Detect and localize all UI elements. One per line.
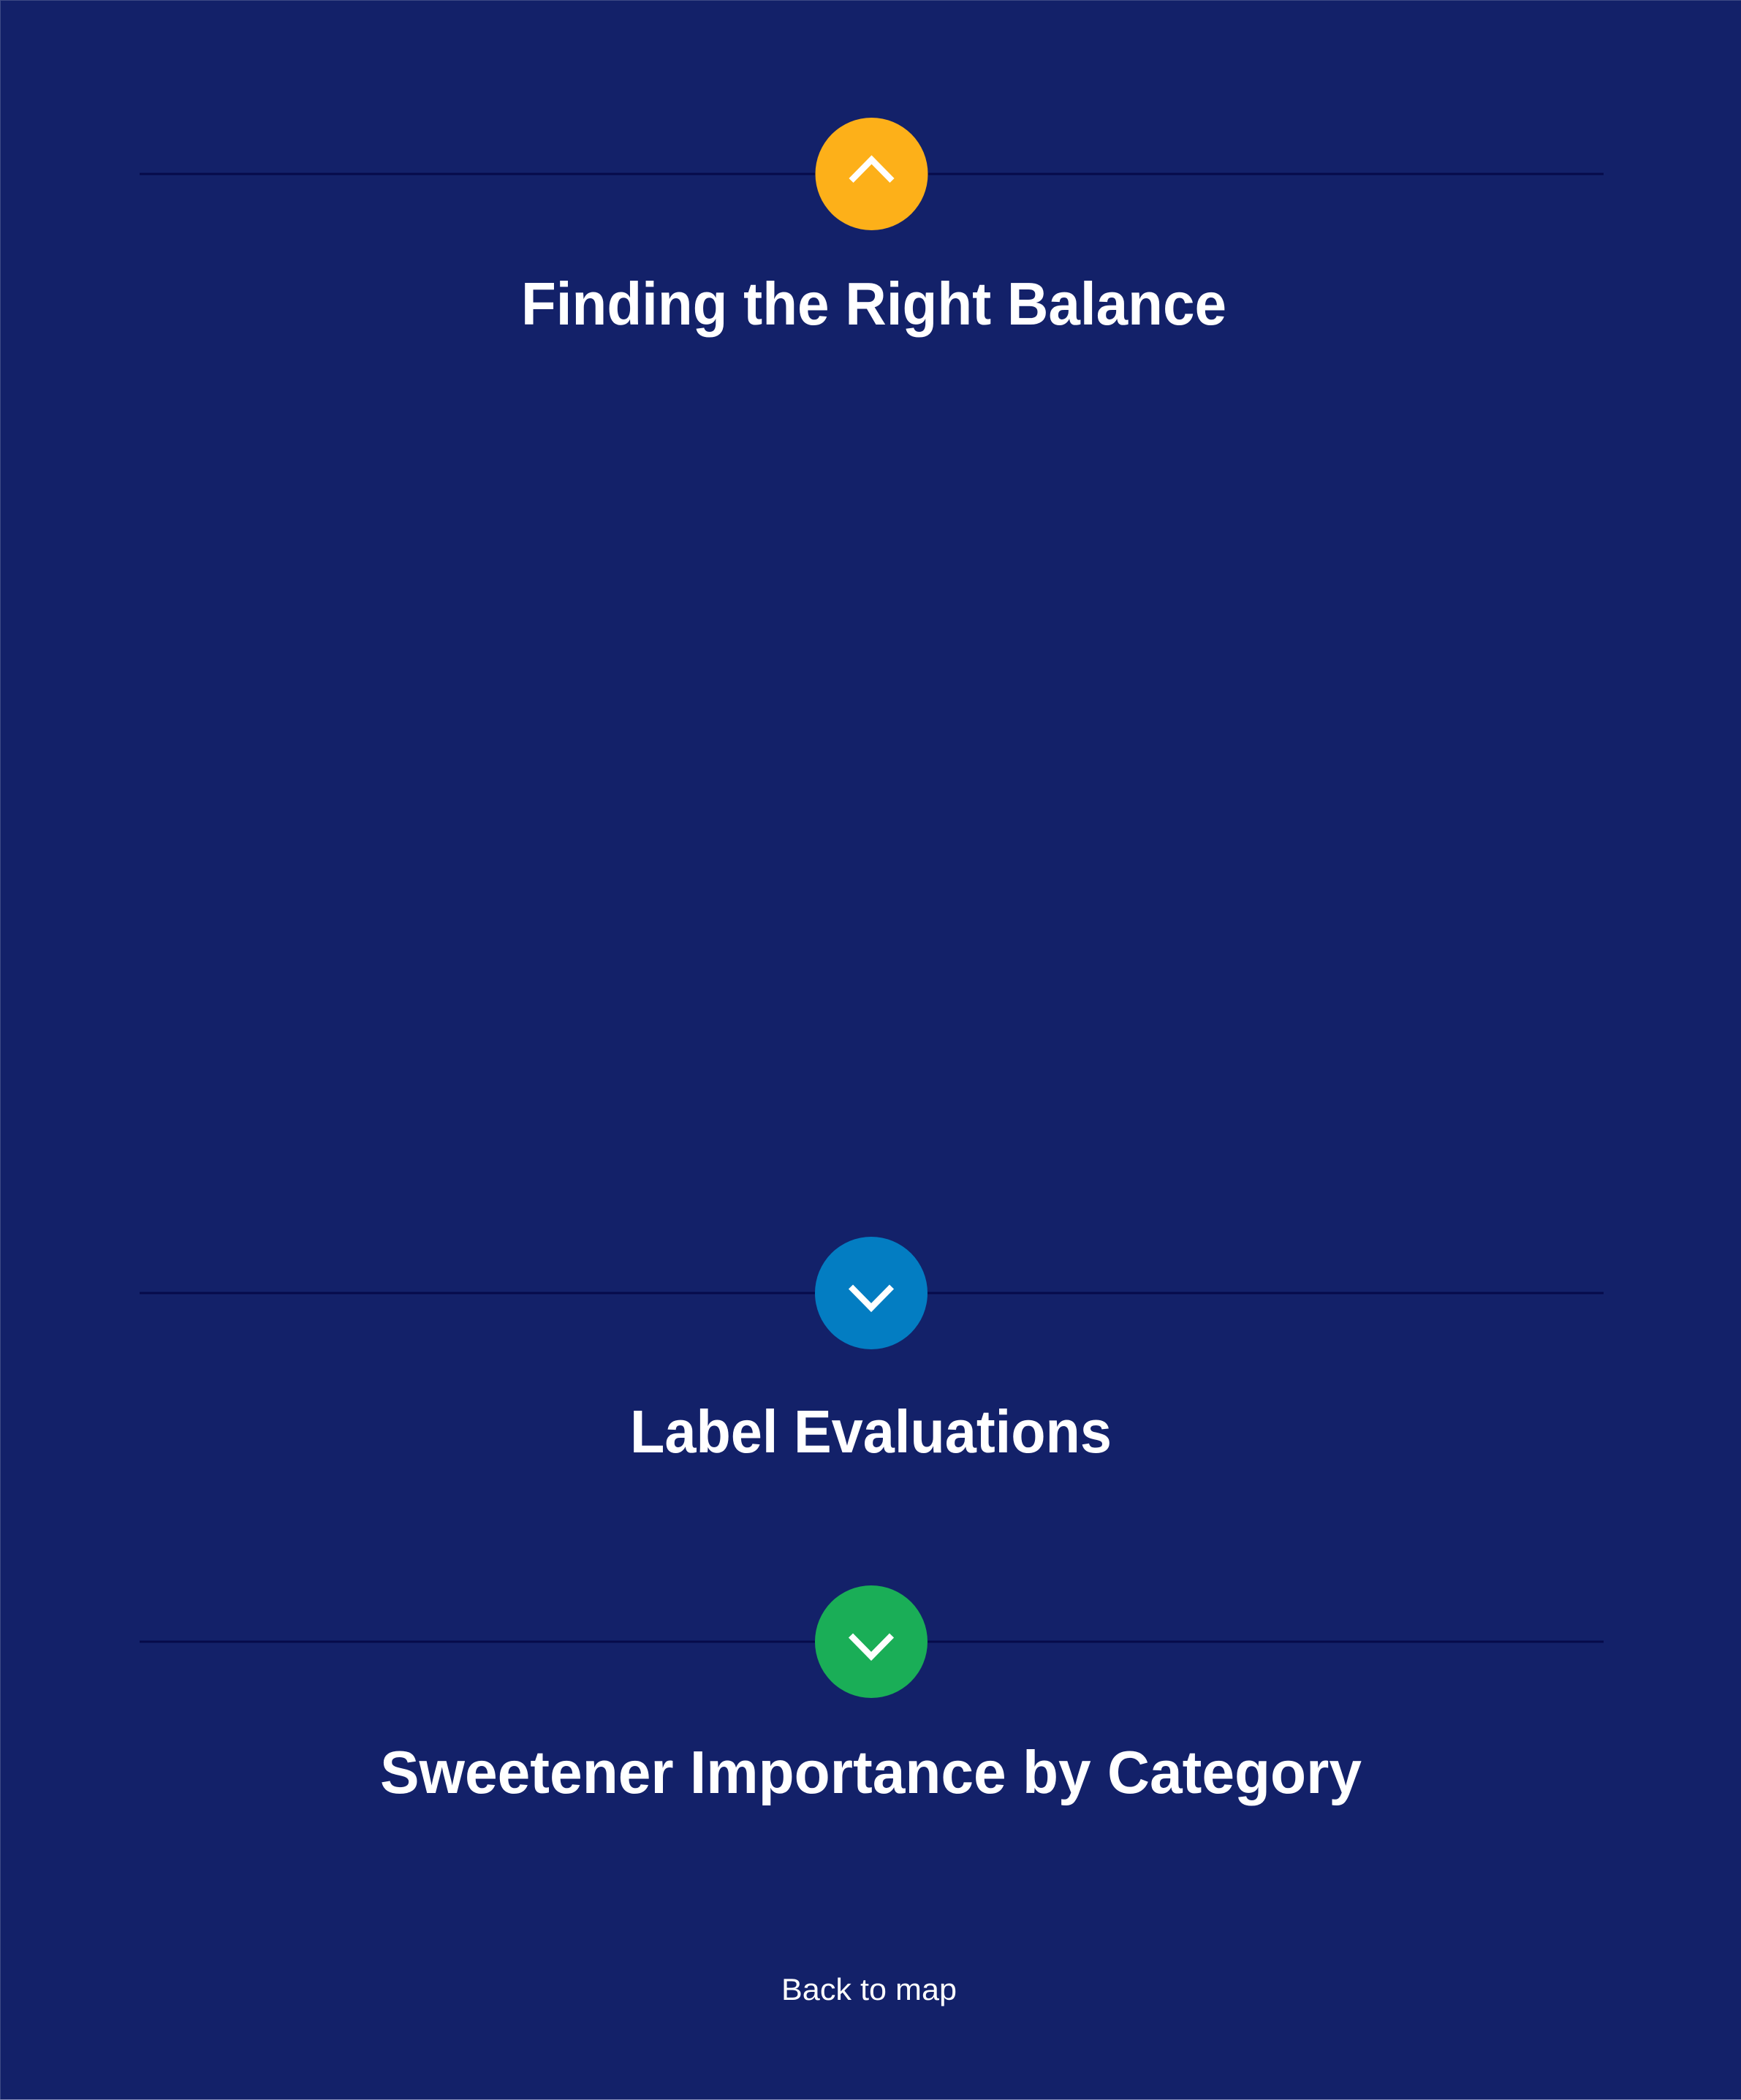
section: Finding the Right Balance: [140, 118, 1604, 338]
icon: amber circle with up chevron: [816, 118, 928, 230]
icon: green circle with down chevron: [815, 1585, 928, 1698]
heading: Sweetener Importance by Category: Sweetener Importance by Category: [380, 1738, 1362, 1806]
section: Label Evaluations: [140, 1237, 1604, 1466]
icon: blue circle with down chevron: [815, 1237, 928, 1349]
link text: Back to map: Back to map: [781, 1972, 957, 2006]
heading: Label Evaluations: Label Evaluations: [630, 1398, 1112, 1466]
section: Sweetener Importance by Category: [140, 1585, 1604, 1806]
heading: Finding the Right Balance: Finding the Right Balance: [521, 270, 1226, 338]
